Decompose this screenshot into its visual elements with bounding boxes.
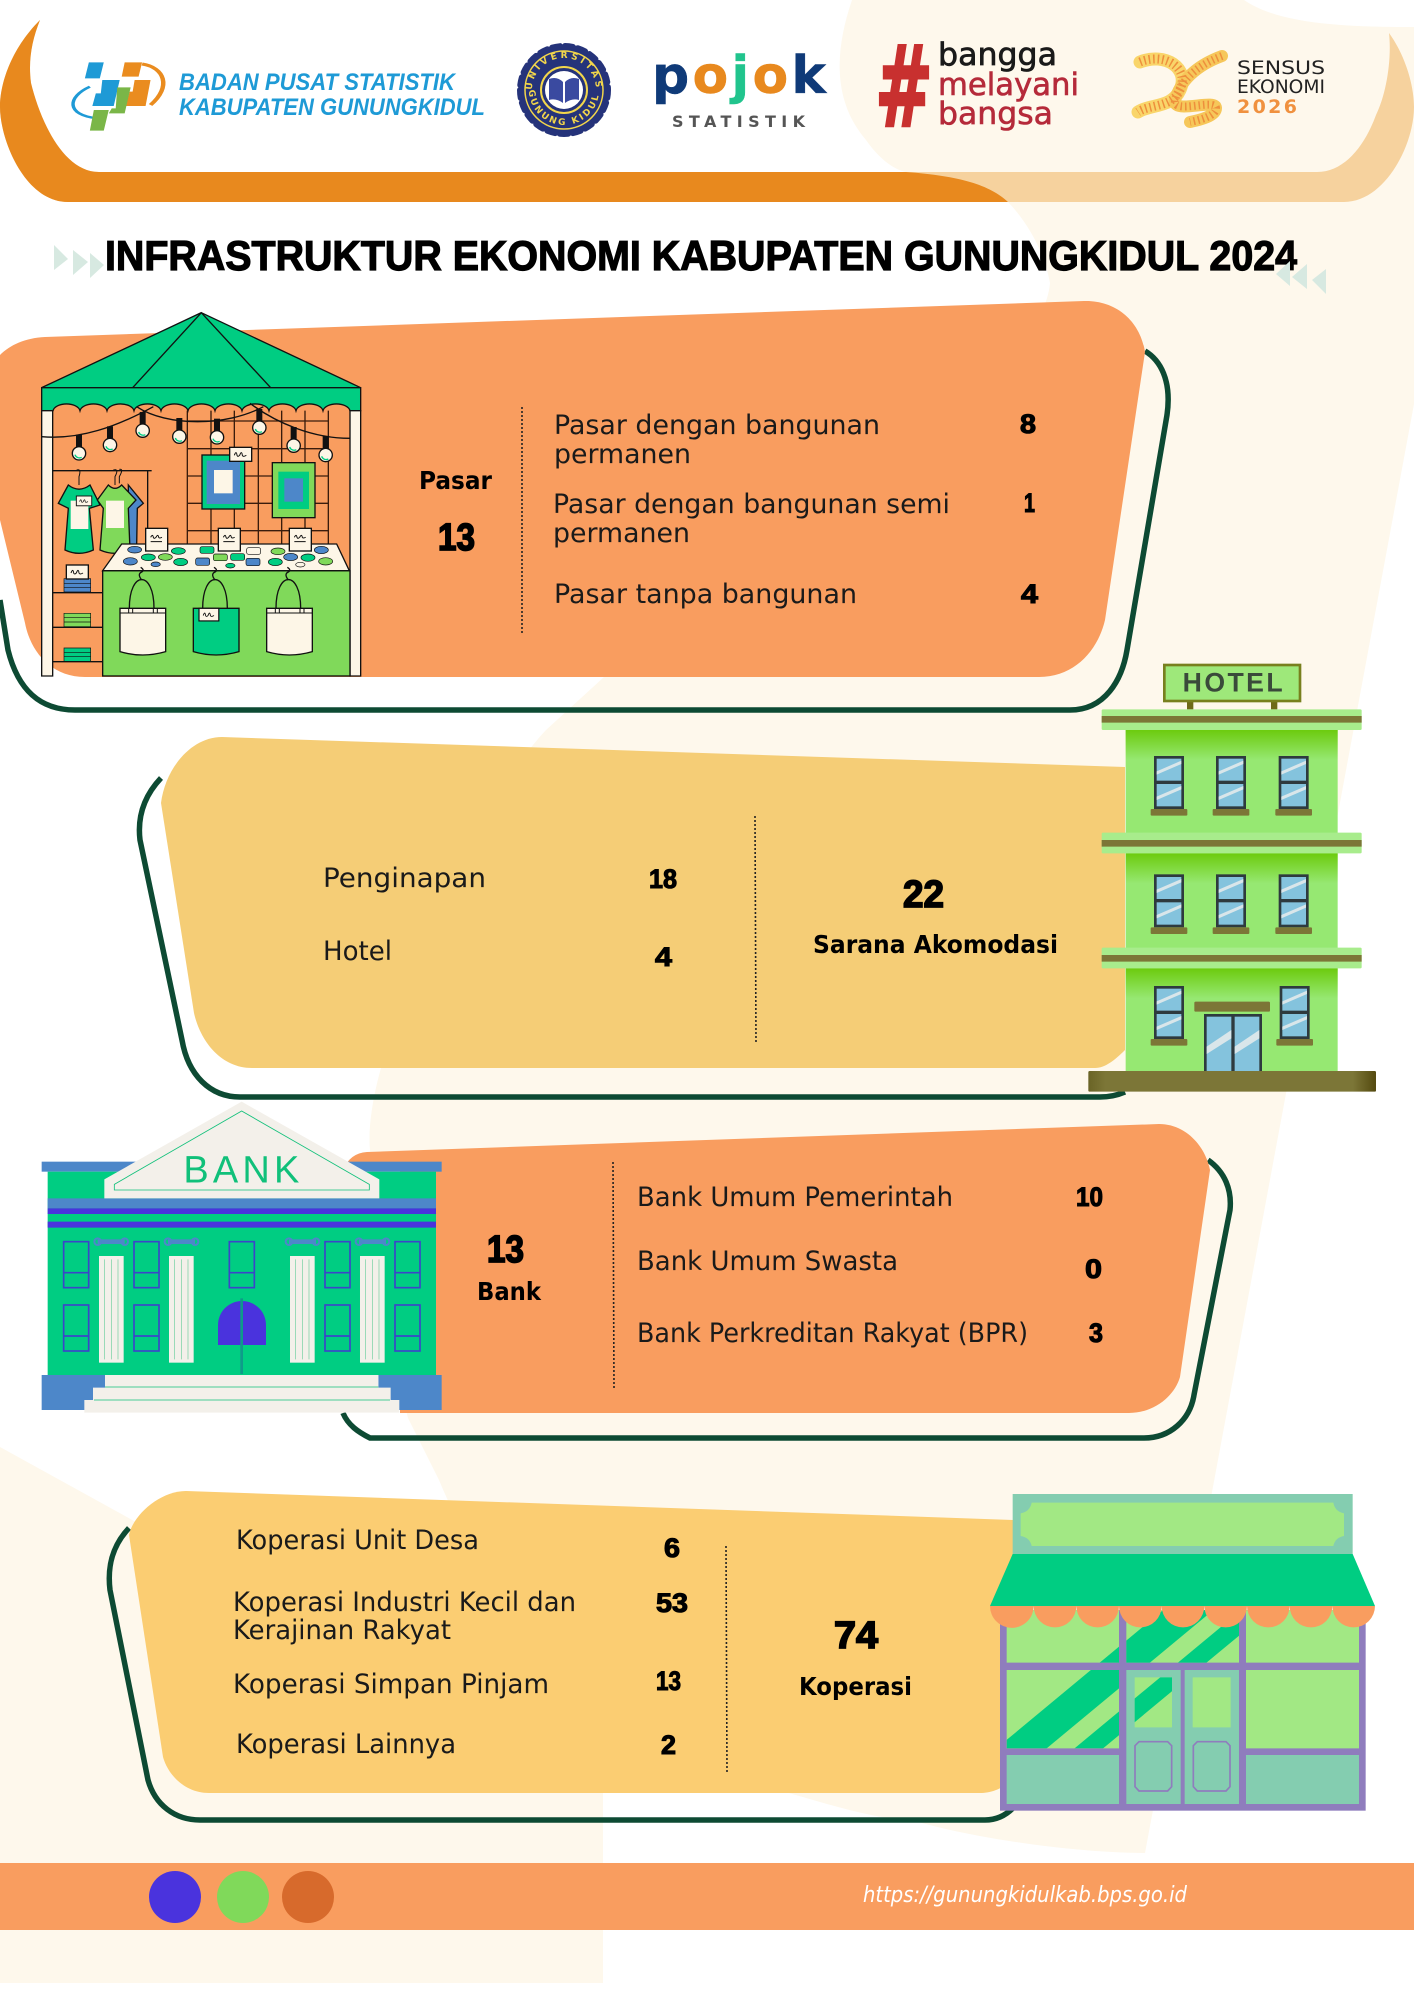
row simpan pinjam: Koperasi Simpan Pinjam [233,1669,549,1700]
illustration: hotel building: HOTEL [1183,668,1283,698]
bank pediment [104,1102,379,1198]
header crescent: orange part [0,20,1008,202]
folded piles [64,579,91,592]
hotel entrance [1194,1002,1270,1012]
row swasta [637,1246,1102,1284]
footer url: https://gunungkidulkab.bps.go.id [863,1883,1188,1908]
row lainnya [236,1729,676,1760]
row penginapan [323,863,677,894]
row penginapan: 18 [649,864,677,894]
illustration: bank building [42,1102,442,1413]
string lights [42,403,350,438]
illustration: bank building: BANK [183,1150,299,1192]
row pemerintah: Bank Umum Pemerintah [637,1182,953,1213]
logo: bangga melayani bangsa: melayani [938,67,1079,103]
logo: pojok statistik: pojok [652,46,827,106]
logo text: BPS: BADAN PUSAT STATISTIK [179,69,457,96]
shop glass [1007,1610,1359,1748]
bank steps [84,1375,399,1413]
pasar row 2: 1 [1024,488,1035,518]
stall grid [187,411,328,544]
divider [521,407,523,633]
row industri: Koperasi Industri Kecil dan [233,1587,576,1618]
pasar row 3: Pasar tanpa bangunan [554,579,857,610]
row industri: Kerajinan Rakyat [233,1615,451,1646]
footer dot: green [217,1871,269,1923]
logo: sensus ekonomi 2026: 2026 [1237,96,1297,118]
logo: bangga melayani bangsa: # [875,23,933,153]
row unit desa: Koperasi Unit Desa [236,1525,479,1556]
logo: university seal: UNIVERSITAS [526,52,602,89]
bank windows [64,1242,89,1288]
row unit desa: 6 [664,1533,680,1563]
logo: bangga melayani bangsa: bangsa [938,96,1053,132]
background: lower left cream block [0,1447,603,1983]
row hotel [323,936,672,972]
divider [726,1546,727,1772]
footer dot: blue [149,1871,201,1923]
bank label: Bank [477,1277,542,1306]
row penginapan: Penginapan [323,863,486,894]
panel: bank [343,1124,1210,1413]
row bpr: Bank Perkreditan Rakyat (BPR) [637,1318,1028,1349]
glass stripes [1006,1610,1239,1748]
floor slabs [1102,709,1362,968]
akomodasi label: Sarana Akomodasi [813,930,1058,959]
shop lower panels [1007,1670,1359,1804]
pasar total: 13 [438,517,475,559]
pasar row 3: 4 [1021,579,1038,609]
logo: BPS emblem [73,62,163,131]
bank plinths [42,1375,442,1410]
panel: pasar [0,301,1145,677]
logo: university seal: GUNUNG KIDUL [529,90,599,125]
row industri [233,1587,688,1646]
shop door windows [1135,1677,1231,1727]
panel: koperasi [129,1491,1013,1793]
shop awning [990,1554,1375,1606]
awning scallops [990,1606,1375,1628]
title chevrons left [54,245,104,278]
hotel windows [1151,756,1187,816]
koperasi total: 74 [834,1615,878,1657]
logo text: BPS: KABUPATEN GUNUNGKIDUL [179,94,485,121]
pasar row 1 [554,409,1036,470]
logo: sensus ekonomi 2026 [1138,56,1325,122]
row pemerintah: 10 [1076,1182,1103,1212]
row lainnya: Koperasi Lainnya [236,1729,456,1760]
pasar row 1: Pasar dengan bangunan [554,410,880,441]
bank total: 13 [487,1229,524,1271]
logo: sensus ekonomi 2026: SENSUS [1237,57,1325,79]
counter [103,571,350,676]
illustration: hotel building [1088,665,1376,1092]
divider [613,1162,614,1388]
pasar row 2 [553,488,1035,549]
pasar row 1: 8 [1020,409,1036,439]
row bpr: 3 [1089,1318,1103,1348]
logo: bangga melayani bangsa: bangga [938,37,1057,73]
row swasta: Bank Umum Swasta [637,1246,898,1277]
pasar row 1: permanen [554,439,691,470]
pasar row 3 [554,579,1038,610]
stall posts [42,411,361,676]
bank body [48,1172,436,1375]
background: cream blob [369,0,1414,1853]
bank door [218,1301,266,1345]
logo: bangga melayani bangsa [875,23,1079,153]
panel: sarana akomodasi [161,737,1125,1068]
title chevrons right [1276,261,1326,294]
shop sign [1013,1494,1353,1554]
hotel sign [1187,700,1277,709]
table signs [146,528,311,551]
row hotel: 4 [655,942,672,972]
shop frame [1000,1610,1366,1811]
pasar row 2: permanen [553,518,690,549]
bank cornice [42,1162,442,1172]
divider [755,816,756,1043]
tote bags [120,567,166,655]
header band [0,20,1414,202]
row industri: 53 [656,1588,688,1618]
pasar label: Pasar [419,466,493,495]
footer band [0,1863,1414,1930]
bank columns [99,1256,124,1363]
logo: pojok statistik: STATISTIK [672,112,806,131]
koperasi label: Koperasi [799,1672,912,1701]
logo: university seal [517,43,611,137]
pasar row 2: Pasar dengan bangunan semi [553,489,950,520]
header crescent: peach part [0,20,1414,202]
logo: sensus ekonomi 2026: EKONOMI [1237,76,1325,98]
akomodasi total: 22 [903,874,944,916]
row unit desa [236,1525,680,1563]
illustration: shop front [990,1494,1375,1811]
illustration: market stall [42,313,361,676]
items on counter [123,546,333,568]
hotel base [1088,1071,1376,1092]
stall valance [42,388,361,411]
stall roof [42,313,361,388]
row hotel: Hotel [323,936,392,967]
row lainnya: 2 [661,1730,676,1760]
row simpan pinjam [233,1666,681,1700]
hotel body [1126,730,1338,1072]
logo text: BPS [179,69,485,121]
framed pictures [202,455,245,509]
panel outlines [0,351,1230,1820]
title: INFRASTRUKTUR EKONOMI KABUPATEN GUNUNGKIDUL 2024 [105,232,1298,279]
footer dot: orange [282,1871,334,1923]
row swasta: 0 [1085,1254,1102,1284]
clothes rack [53,471,152,662]
row simpan pinjam: 13 [656,1666,681,1696]
